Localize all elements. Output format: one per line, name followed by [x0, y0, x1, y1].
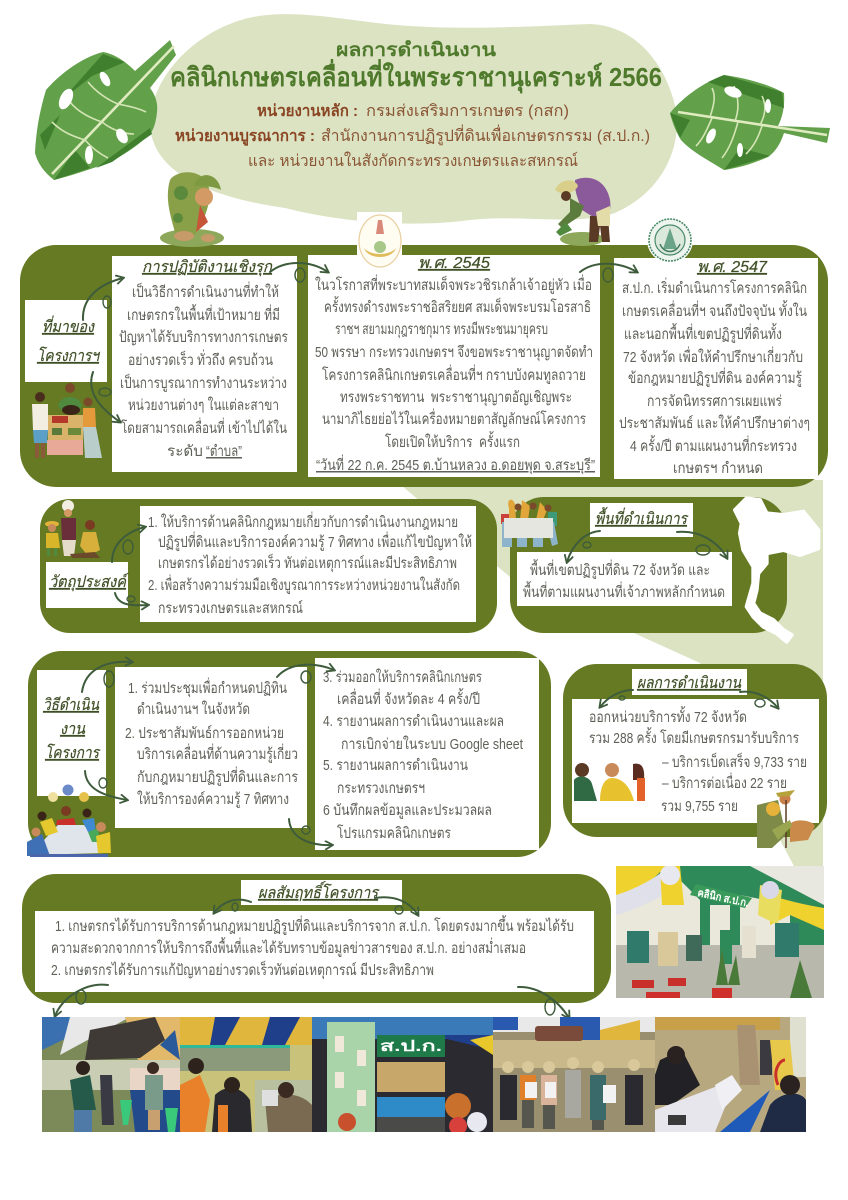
- text box: outcomes: 2. เกษตรกรได้รับการแก้ปัญหาอย่างรวดเร็วทันต่อเหตุการณ์ มีประสิทธิภาพ: [51, 960, 434, 980]
- lead and integrating agencies: หน่วยงานบูรณาการ :: [175, 128, 315, 147]
- text box: operation area: พื้นที่ตามแผนงานที่เจ้าภาพหลักกำหนด: [523, 581, 725, 601]
- text box: steps 3-6: 4. รายงานผลการดำเนินงานและผล: [323, 713, 504, 730]
- text box: steps 1-2: 1. ร่วมประชุมเพื่อกำหนดปฏิทิน: [128, 677, 287, 698]
- panel: objectives: [40, 499, 497, 633]
- panel: operation results: [563, 664, 827, 848]
- text box: proactive operation: เป็นการบูรณาการทำงานระหว่าง: [120, 373, 287, 392]
- text box: B.E. 2547: เกษตรเคลื่อนที่ฯ จนถึงปัจจุบัน ทั้งใน: [622, 300, 807, 321]
- panel: project background: [20, 245, 828, 487]
- text box: proactive operation: โดยสามารถเคลื่อนที่ เข้าไปได้ใน: [121, 417, 287, 437]
- text box: B.E. 2545: ทรงพระราชทาน พระราชานุญาตอัญเชิญพระ: [340, 389, 572, 407]
- text box: B.E. 2547: และนอกพื้นที่เขตปฏิรูปที่ดินทั้ง: [624, 323, 782, 343]
- text box: B.E. 2547: การจัดนิทรรศการเผยแพร่: [647, 393, 782, 410]
- arrows: operation results: [600, 690, 778, 708]
- text box: B.E. 2545: พ.ศ. 2545: [418, 255, 490, 272]
- text box: B.E. 2545: ในวโรกาสที่พระบาทสมเด็จพระวชิรเกล้าเจ้าอยู่หัว เมื่อ: [315, 274, 592, 294]
- text box: proactive operation: เกษตรกรในพื้นที่เป้าหมาย ที่มี: [127, 304, 280, 324]
- text box: B.E. 2547: [614, 258, 818, 479]
- arrows: objectives: [112, 527, 148, 605]
- background: pale green diagonal band: [395, 480, 823, 868]
- text box: steps 1-2: 2. ประชาสัมพันธ์การออกหน่วย: [125, 725, 284, 742]
- text box: objectives list: เกษตรกรได้อย่างรวดเร็ว ทันต่อเหตุการณ์และมีประสิทธิภาพ: [158, 553, 457, 573]
- text box: operation area: [517, 552, 732, 606]
- text box: outcomes: 1. เกษตรกรได้รับการบริการด้านกฎหมายปฏิรูปที่ดินและบริการจาก ส.ป.ก. โดยตรงมากขึ้น พร้อมได้รับ: [55, 915, 574, 935]
- illustration: people holding banner: [501, 500, 558, 547]
- text box: proactive operation: การปฏิบัติงานเชิงรุก: [142, 259, 273, 277]
- heading: operation results: [632, 669, 747, 695]
- text box: proactive operation: อย่างรวดเร็ว ทั่วถึง ครบถ้วน: [128, 349, 273, 369]
- header blob with title: [150, 14, 677, 224]
- text box: steps 1-2: กับกฎหมายปฏิรูปที่ดินและการ: [137, 766, 298, 786]
- icon: left leaf: [35, 40, 176, 180]
- panel: operation area: [510, 497, 787, 633]
- text box: steps 3-6: [315, 658, 539, 850]
- icon: left farmer planting: [160, 172, 224, 247]
- text box: objectives list: ปฏิรูปที่ดินและบริการองค์ความรู้ 7 ทิศทาง เพื่อแก้ไขปัญหาให้: [158, 531, 472, 551]
- lead and integrating agencies: [175, 102, 650, 170]
- arrows: project method: [82, 662, 334, 845]
- photo 5: registration table: [655, 1017, 806, 1132]
- panel label: objectives: [46, 562, 129, 608]
- text box: B.E. 2545: [308, 255, 600, 477]
- text box: service numbers: – บริการเบ็ดเสร็จ 9,733 ราย: [662, 752, 807, 771]
- text box: B.E. 2545: ครั้งทรงดำรงพระราชอิสริยยศ สมเด็จพระบรมโอรสาธิ: [324, 296, 591, 316]
- panel label: origin of the project: โครงการฯ: [37, 346, 101, 365]
- photo: clinic tent with green sign: [616, 866, 824, 998]
- text box: proactive operation: [112, 256, 297, 472]
- text box: proactive operation: หน่วยงานต่างๆ ในแต่ละสาขา: [128, 396, 279, 414]
- text box: outcomes: ความสะดวกจากการให้บริการถึงพื้นที่และได้รับทราบข้อมูลข่าวสารของ ส.ป.ก. อย่างสม่ำเสมอ: [51, 937, 526, 957]
- panel label: project method: งาน: [60, 721, 86, 738]
- title: คลินิกเกษตรเคลื่อนที่ในพระราชานุเคราะห์ 2566: [170, 58, 662, 94]
- arrows: project outcomes: [55, 897, 569, 1018]
- photo 1: visitors at tent: [42, 1017, 180, 1132]
- text box: B.E. 2545: ราชฯ สยามมกุฎราชกุมาร ทรงมีพระชนมายุครบ: [335, 321, 548, 339]
- title: [170, 40, 662, 94]
- text box: objectives list: 1. ให้บริการด้านคลินิกกฎหมายเกี่ยวกับการดำเนินงานกฎหมาย: [148, 511, 458, 531]
- lead and integrating agencies: และ หน่วยงานในสังกัดกระทรวงเกษตรและสหกรณ์: [248, 151, 578, 170]
- heading: operation results: ผลการดำเนินงาน: [637, 674, 742, 692]
- text box: steps 3-6: โปรแกรมคลินิกเกษตร: [337, 824, 451, 842]
- text box: objectives list: [140, 506, 476, 622]
- text box: service numbers: รวม 9,755 ราย: [661, 798, 738, 815]
- logo: clinic emblem: [357, 212, 402, 268]
- heading: operation area: [590, 503, 693, 537]
- text box: objectives list: กระทรวงเกษตรและสหกรณ์: [158, 600, 303, 617]
- text box: steps 3-6: การเบิกจ่ายในระบบ Google sheet: [341, 735, 524, 753]
- text box: proactive operation: ปัญหาได้รับบริการทางการเกษตร: [119, 328, 288, 346]
- photo 3: ALRO booth with banner: [312, 1017, 493, 1132]
- photo 4: group holding certificates: [493, 1017, 655, 1132]
- photo strip: mobile clinic service events: [42, 1017, 806, 1135]
- text box: operation area: พื้นที่เขตปฏิรูปที่ดิน 72 จังหวัด และ: [530, 559, 710, 579]
- panel label: project method: วิธีดำเนิน: [43, 696, 100, 714]
- text box: steps 3-6: เคลื่อนที่ จังหวัดละ 4 ครั้ง/ปี: [337, 688, 480, 708]
- panel: project method: [28, 651, 551, 857]
- text box: service numbers: – บริการต่อเนื่อง 22 ราย: [662, 772, 787, 792]
- text box: steps 1-2: ดำเนินงานฯ ในจังหวัด: [137, 700, 250, 718]
- icon: right farmer planting: [555, 178, 610, 246]
- text box: proactive operation: “ตำบล”: [206, 443, 242, 460]
- panel label: origin of the project: [25, 300, 107, 382]
- photo 3: ALRO booth with banner: ส.ป.ก.: [380, 1038, 442, 1055]
- heading: project outcomes: ผลสัมฤทธิ์โครงการ: [258, 881, 380, 902]
- text box: B.E. 2545: 50 พรรษา กระทรวงเกษตรฯ จึงขอพระราชานุญาตจัดทำ: [315, 344, 593, 362]
- text box: steps 3-6: 6 บันทึกผลข้อมูลและประมวลผล: [323, 802, 492, 819]
- text box: B.E. 2547: เกษตรฯ กำหนด: [673, 460, 763, 477]
- text box: steps 1-2: [115, 667, 307, 828]
- photo 2: staff in orange: [180, 1017, 312, 1132]
- panel label: origin of the project: ที่มาของ: [42, 315, 95, 336]
- text box: steps 1-2: บริการเคลื่อนที่ด้านความรู้เกี่ยว: [137, 743, 298, 763]
- text box: B.E. 2547: 4 ครั้ง/ปี ตามแผนงานที่กระทรวง: [630, 435, 797, 455]
- text box: B.E. 2547: พ.ศ. 2547: [697, 259, 768, 276]
- arrows: operation area: [567, 531, 727, 562]
- text box: outcomes: [35, 911, 594, 992]
- illustration: farmer with cow: [757, 790, 815, 848]
- text box: steps 3-6: 5. รายงานผลการดำเนินงาน: [323, 757, 468, 774]
- logo: ALRO seal: [647, 217, 693, 263]
- title: ผลการดำเนินงาน: [336, 40, 496, 61]
- text box: B.E. 2545: โดยเปิดให้บริการ ครั้งแรก: [385, 431, 520, 451]
- icon: map of Thailand: [735, 498, 818, 642]
- text box: service numbers: ออกหน่วยบริการทั้ง 72 จังหวัด: [589, 706, 747, 726]
- text box: B.E. 2545: “วันที่ 22 ก.ค. 2545 ต.บ้านหลวง อ.ดอยพุด จ.สระบุรี”: [316, 454, 595, 475]
- text box: B.E. 2545: โครงการคลินิกเกษตรเคลื่อนที่ฯ กราบบังคมทูลถวาย: [322, 364, 586, 384]
- text box: steps 3-6: กระทรวงเกษตรฯ: [337, 780, 425, 797]
- illustration: three people talking: [574, 763, 645, 801]
- text box: steps 3-6: 3. ร่วมออกให้บริการคลินิกเกษตร: [323, 668, 482, 686]
- panel: project outcomes: [22, 874, 611, 1003]
- lead and integrating agencies: หน่วยงานหลัก :: [257, 102, 358, 120]
- panel label: project method: [37, 670, 106, 796]
- heading: project outcomes: [241, 880, 402, 905]
- illustration: family of farmers: [45, 500, 100, 558]
- text box: proactive operation: เป็นวิธีการดำเนินงานที่ทำให้: [132, 281, 279, 301]
- panel label: project method: โครงการ: [45, 743, 101, 762]
- text box: B.E. 2547: ข้อกฎหมายปฏิรูปที่ดิน องค์ความรู้: [628, 367, 802, 387]
- illustration: market stall vendors: [32, 383, 102, 458]
- arrows: project background: [83, 263, 637, 422]
- text box: B.E. 2545: นามาภิไธยย่อไว้ในเครื่องหมายตาสัญลักษณ์โครงการ: [322, 408, 586, 428]
- text box: objectives list: 2. เพื่อสร้างความร่วมมือเชิงบูรณาการระหว่างหน่วยงานในสังกัด: [148, 574, 460, 594]
- lead and integrating agencies: สำนักงานการปฏิรูปที่ดินเพื่อเกษตรกรรม (ส.ป.ก.): [321, 124, 650, 146]
- icon: right leaf: [670, 75, 830, 170]
- illustration: meeting around a table: [27, 784, 111, 857]
- text box: service numbers: รวม 288 ครั้ง โดยมีเกษตรกรมารับบริการ: [589, 727, 799, 747]
- heading: operation area: พื้นที่ดำเนินการ: [595, 507, 689, 528]
- text box: steps 1-2: ให้บริการองค์ความรู้ 7 ทิศทาง: [137, 790, 289, 808]
- panel label: objectives: วัตถุประสงค์: [49, 572, 129, 592]
- text box: B.E. 2547: 72 จังหวัด เพื่อให้คำปรึกษาเกี่ยวกับ: [623, 346, 803, 366]
- text box: service numbers: [572, 699, 819, 823]
- photo: clinic tent with green sign: คลินิก ส.ป.ก.: [696, 886, 750, 910]
- lead and integrating agencies: กรมส่งเสริมการเกษตร (กสก): [366, 103, 569, 120]
- text box: proactive operation: ระดับ: [167, 443, 203, 460]
